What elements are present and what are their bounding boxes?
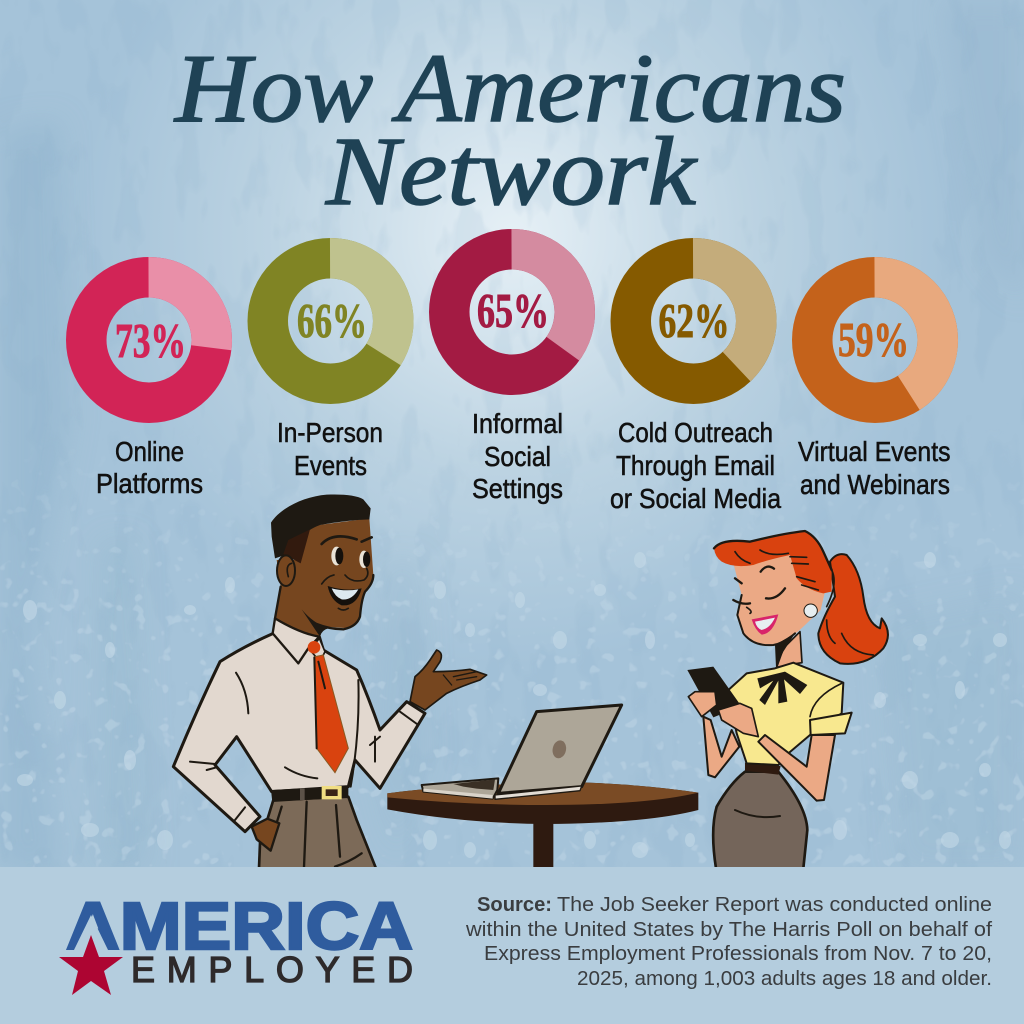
logo: America Employed <box>59 889 413 995</box>
donut chart: cold outreach 62%: 62% <box>658 293 730 348</box>
label: in-person events: In-Person <box>277 417 383 448</box>
source note <box>465 894 992 990</box>
logo: America Employed: AMERICA <box>66 889 413 964</box>
donut chart: in-person events 66%: 66% <box>297 293 367 348</box>
illustration: cafe table with laptop <box>387 705 698 867</box>
donut chart: virtual events 59%: 59% <box>838 312 909 367</box>
label: virtual events and webinars <box>798 436 950 500</box>
source note: 2025, among 1,003 adults ages 18 and older. <box>577 968 992 990</box>
donut chart: virtual events 59% <box>812 277 938 403</box>
donut chart: informal social settings 65%: 65% <box>477 283 549 338</box>
label: online platforms: Platforms <box>96 468 203 499</box>
label: virtual events and webinars: Virtual Events <box>798 436 950 467</box>
title <box>173 35 846 226</box>
donut chart: cold outreach 62% <box>631 258 756 384</box>
label: virtual events and webinars: and Webinars <box>800 469 950 500</box>
footer band <box>0 867 1024 1024</box>
label: informal social settings: Settings <box>472 473 563 504</box>
donut chart: online platforms 73%: 73% <box>115 313 186 368</box>
source note: Source: <box>477 894 552 916</box>
label: informal social settings <box>472 408 563 504</box>
title: Network <box>325 118 698 226</box>
label: cold outreach <box>610 417 781 514</box>
label: informal social settings: Informal <box>472 408 563 439</box>
label: in-person events <box>277 417 383 481</box>
source note: Express Employment Professionals from Nov. 7 to 20, <box>484 943 992 965</box>
label: online platforms: Online <box>115 436 184 467</box>
illustration: man in shirt and tie <box>173 495 487 868</box>
label: in-person events: Events <box>294 450 367 481</box>
source note: The Job Seeker Report was conducted online <box>557 894 992 916</box>
donut chart: in-person events 66% <box>268 258 393 384</box>
label: informal social settings: Social <box>484 441 551 472</box>
label: online platforms <box>96 436 203 499</box>
donut chart: online platforms 73% <box>86 277 212 403</box>
label: cold outreach: Through Email <box>616 450 775 481</box>
title: How Americans <box>173 35 846 143</box>
logo: America Employed: EMPLOYED <box>131 949 413 990</box>
source note: within the United States by The Harris Poll on behalf of <box>465 919 992 941</box>
label: cold outreach: Cold Outreach <box>618 417 773 448</box>
donut chart: informal social settings 65% <box>449 249 575 375</box>
illustration: woman with smartphone <box>687 531 888 868</box>
label: cold outreach: or Social Media <box>610 483 781 514</box>
